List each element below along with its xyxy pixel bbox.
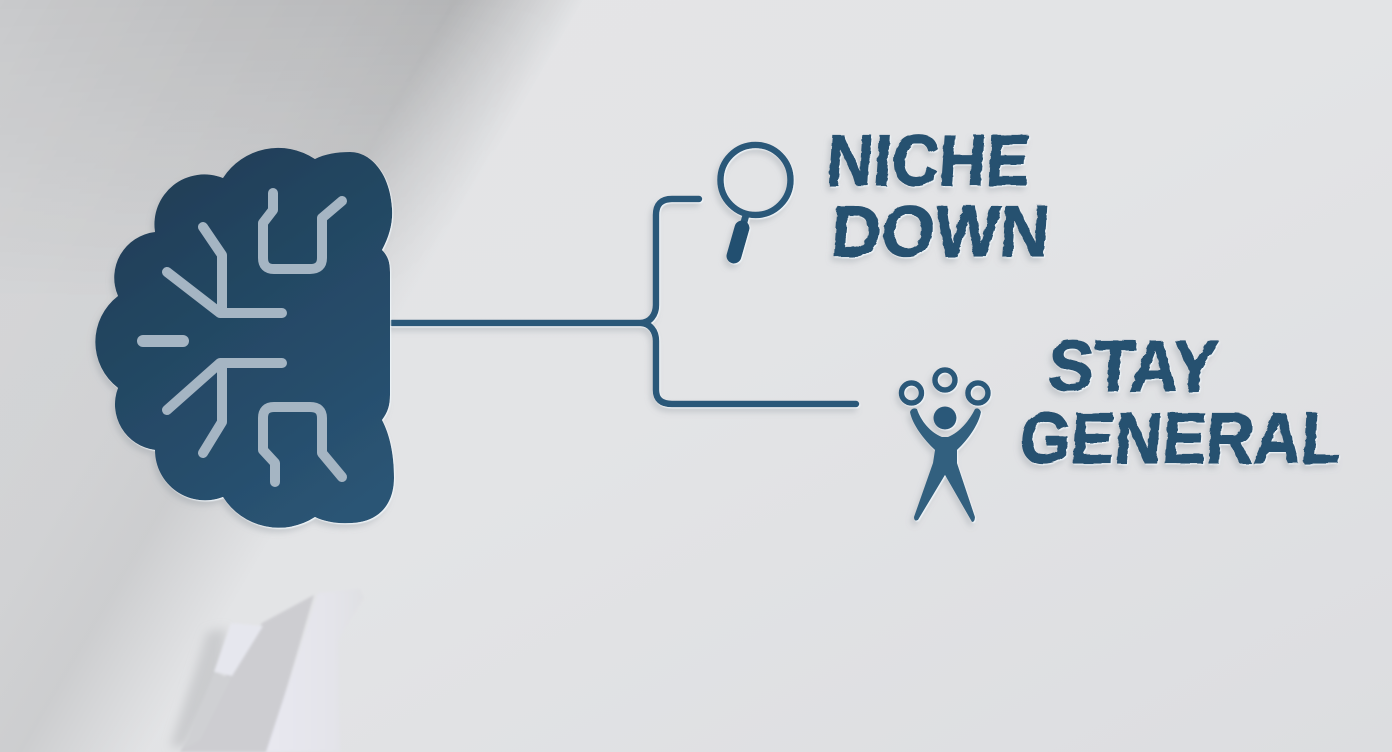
heading: stay general: GENERAL <box>1017 399 1344 479</box>
heading: niche down: NICHE <box>824 121 1032 201</box>
monitor stand silhouette <box>170 589 364 752</box>
icon: person juggling rings <box>902 370 988 522</box>
heading: niche down <box>824 121 1052 272</box>
brain silhouette <box>95 148 394 528</box>
heading: stay general <box>1017 327 1344 479</box>
icon: brain with circuit lines <box>95 148 394 528</box>
connector lines <box>392 199 856 404</box>
circuit traces <box>143 193 342 482</box>
heading: stay general: STAY <box>1046 327 1220 407</box>
diagonal wall shadow <box>0 0 565 752</box>
heading: niche down: DOWN <box>829 192 1052 272</box>
icon: magnifying glass <box>720 145 790 256</box>
